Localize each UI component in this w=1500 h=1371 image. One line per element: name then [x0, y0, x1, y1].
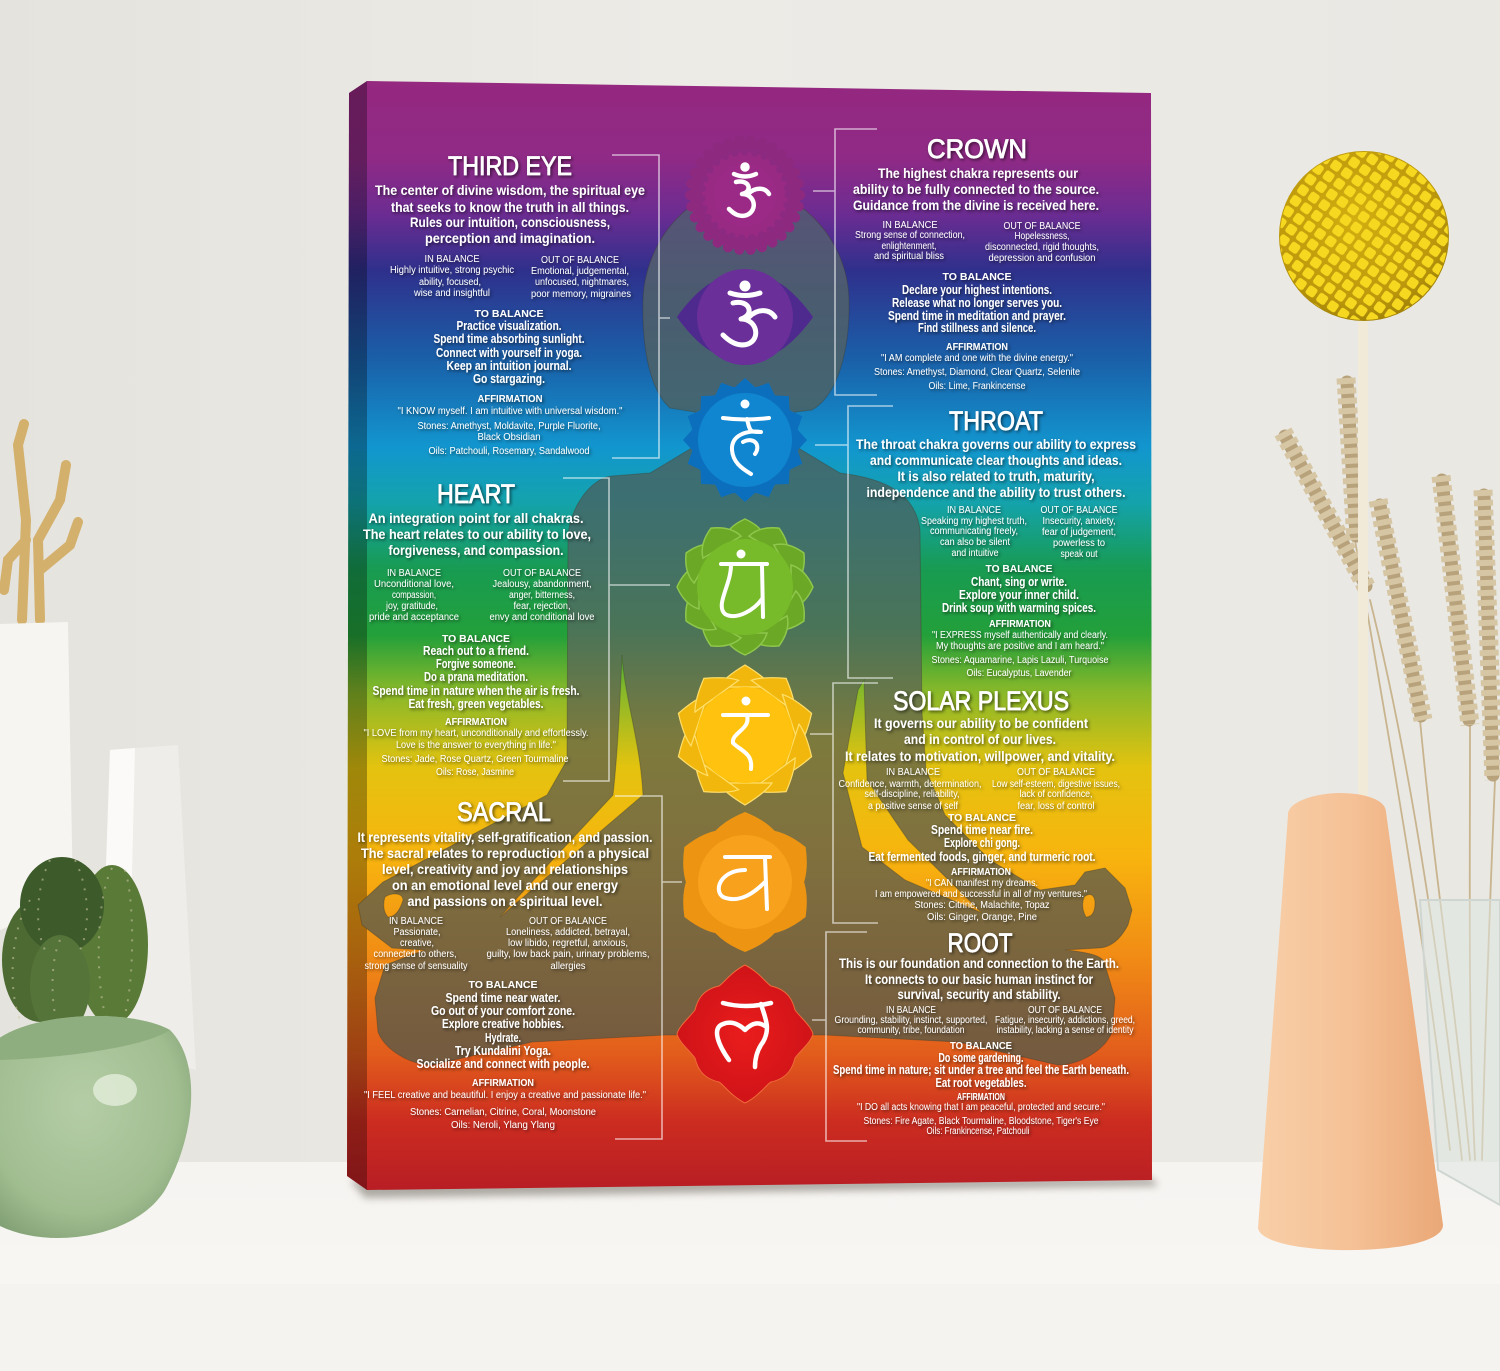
affirmation and stones: AFFIRMATION [478, 394, 542, 405]
out of balance: OUT OF BALANCE [1004, 221, 1081, 232]
to balance: TO BALANCE [948, 812, 1016, 824]
third eye symbol [723, 283, 775, 345]
description: and passions on a spiritual level. [408, 893, 602, 909]
description: Guidance from the divine is received here. [853, 197, 1099, 213]
out of balance: anger, bitterness, [509, 590, 575, 601]
affirmation and stones: Love is the answer to everything in life." [396, 740, 556, 751]
affirmation and stones: "I KNOW myself. I am intuitive with universal wisdom." [398, 406, 623, 417]
to balance: Drink soup with warming spices. [942, 601, 1096, 615]
description: Rules our intuition, consciousness, [410, 214, 610, 230]
in balance: creative, [400, 938, 434, 949]
out of balance: OUT OF BALANCE [1017, 767, 1095, 778]
affirmation and stones: AFFIRMATION [951, 867, 1011, 878]
affirmation and stones [932, 619, 1109, 679]
panel: third eye [375, 151, 645, 457]
canvas: rainbow background with spine [347, 81, 1152, 1190]
out of balance: disconnected, rigid thoughts, [985, 242, 1099, 253]
out of balance: depression and confusion [988, 253, 1096, 264]
sacral symbol [719, 857, 770, 909]
to balance: Spend time near water. [446, 991, 560, 1005]
out of balance: Low self-esteem, digestive issues, [992, 779, 1120, 790]
description [375, 182, 645, 246]
description [839, 955, 1119, 1002]
affirmation and stones [875, 867, 1087, 923]
affirmation and stones: Stones: Amethyst, Moldavite, Purple Fluorite, [418, 421, 600, 432]
description [856, 436, 1136, 500]
description [845, 715, 1115, 764]
affirmation and stones: Oils: Eucalyptus, Lavender [966, 668, 1072, 679]
to balance: Eat root vegetables. [936, 1076, 1026, 1090]
description: The sacral relates to reproduction on a physical [361, 845, 649, 861]
to balance: Practice visualization. [456, 319, 562, 333]
affirmation and stones: Stones: Amethyst, Diamond, Clear Quartz, Selenite [874, 367, 1080, 378]
in balance: Passionate, [394, 927, 440, 938]
affirmation and stones [398, 394, 623, 457]
to balance: Socialize and connect with people. [416, 1057, 590, 1071]
decor: cactus [2, 857, 148, 1035]
heading: sacral: SACRAL [457, 797, 551, 827]
panel: root [833, 928, 1135, 1137]
to balance: TO BALANCE [474, 308, 544, 320]
in balance: self-discipline, reliability, [864, 789, 960, 800]
affirmation and stones [364, 1078, 646, 1131]
affirmation and stones: Stones: Fire Agate, Black Tourmaline, Bloodstone, Tiger's Eye [864, 1116, 1099, 1127]
affirmation and stones: I am empowered and successful in all of my ventures." [875, 889, 1087, 900]
in balance: Confidence, warmth, determination, [838, 779, 982, 790]
in balance: IN BALANCE [947, 505, 1001, 516]
out of balance: speak out [1060, 549, 1098, 560]
description: An integration point for all chakras. [368, 510, 584, 526]
out of balance: unfocused, nightmares, [535, 277, 629, 288]
to balance: Spend time in meditation and prayer. [888, 309, 1066, 323]
throat symbol [723, 402, 769, 474]
decor: yellow ball flower [1279, 151, 1449, 321]
in balance: IN BALANCE [886, 767, 940, 778]
in balance: wise and insightful [413, 288, 490, 299]
in balance: connected to others, [374, 949, 456, 960]
to balance: Keep an intuition journal. [446, 359, 572, 373]
in balance: enlightenment, [882, 241, 936, 252]
description: forgiveness, and compassion. [388, 542, 564, 558]
decor: glass vase [1420, 900, 1500, 1205]
panel: throat [856, 406, 1136, 679]
description [853, 165, 1099, 213]
to balance [888, 271, 1066, 335]
panel: crown [853, 134, 1099, 392]
description: on an emotional level and our energy [392, 877, 618, 893]
chakra: root [677, 965, 813, 1103]
affirmation and stones: Black Obsidian [478, 432, 540, 443]
decor: tall white vase [0, 622, 73, 930]
out of balance: fear, loss of control [1018, 801, 1094, 812]
chakra: throat [683, 378, 807, 502]
to balance: Find stillness and silence. [918, 321, 1036, 335]
affirmation and stones: Oils: Neroli, Ylang Ylang [451, 1120, 555, 1131]
out of balance: OUT OF BALANCE [529, 916, 607, 927]
to balance: Release what no longer serves you. [892, 296, 1062, 310]
in balance: Strong sense of connection, [855, 230, 965, 241]
in balance: IN BALANCE [882, 220, 938, 231]
out of balance [985, 221, 1099, 264]
in balance: community, tribe, foundation [858, 1025, 964, 1036]
out of balance: poor memory, migraines [531, 289, 631, 300]
in balance: IN BALANCE [389, 916, 443, 927]
panel: heart [363, 479, 595, 778]
in balance: ability, focused, [419, 277, 481, 288]
affirmation and stones: My thoughts are positive and I am heard." [936, 641, 1104, 652]
affirmation and stones: AFFIRMATION [472, 1078, 534, 1089]
affirmation and stones: "I CAN manifest my dreams. [926, 878, 1038, 889]
to balance: Do a prana meditation. [424, 670, 528, 684]
in balance: Highly intuitive, strong psychic [390, 265, 514, 276]
affirmation and stones [364, 717, 588, 778]
to balance [434, 308, 584, 386]
affirmation and stones: Stones: Carnelian, Citrine, Coral, Moonstone [410, 1107, 596, 1118]
to balance [942, 563, 1096, 615]
bracket: third eye [612, 155, 670, 458]
in balance: Grounding, stability, instinct, supported, [834, 1015, 988, 1026]
to balance: Explore creative hobbies. [442, 1017, 564, 1031]
description: The heart relates to our ability to love, [363, 526, 591, 542]
to balance: TO BALANCE [468, 979, 538, 991]
out of balance: fear, rejection, [514, 601, 570, 612]
in balance: IN BALANCE [387, 568, 441, 579]
decor: peach vase [1258, 793, 1443, 1250]
description: It is also related to truth, maturity, [898, 468, 1094, 484]
description: It represents vitality, self-gratification, and passion. [358, 829, 652, 845]
affirmation and stones: "I FEEL creative and beautiful. I enjoy a creative and passionate life." [364, 1090, 646, 1101]
description: perception and imagination. [425, 230, 595, 246]
to balance [372, 633, 580, 711]
to balance: Spend time in nature when the air is fresh. [372, 684, 580, 698]
affirmation and stones: "I LOVE from my heart, unconditionally and effortlessly. [364, 728, 588, 739]
affirmation and stones: Oils: Patchouli, Rosemary, Sandalwood [428, 446, 590, 457]
affirmation and stones: AFFIRMATION [957, 1092, 1005, 1103]
out of balance: OUT OF BALANCE [503, 568, 581, 579]
affirmation and stones [857, 1092, 1105, 1137]
out of balance: OUT OF BALANCE [541, 255, 619, 266]
to balance: Spend time absorbing sunlight. [434, 332, 584, 346]
in balance: a positive sense of self [868, 801, 958, 812]
affirmation and stones: Stones: Jade, Rose Quartz, Green Tourmaline [382, 754, 569, 765]
heading: crown: CROWN [927, 134, 1027, 164]
affirmation and stones: Stones: Citrine, Malachite, Topaz [914, 900, 1050, 911]
out of balance: guilty, low back pain, urinary problems, [486, 949, 650, 960]
heart symbol [721, 552, 767, 617]
description: The center of divine wisdom, the spiritual eye [375, 182, 645, 198]
out of balance: OUT OF BALANCE [1040, 505, 1118, 516]
heading: solar plexus: SOLAR PLEXUS [893, 686, 1069, 716]
description: independence and the ability to trust others. [866, 484, 1126, 500]
in balance [834, 1005, 988, 1036]
out of balance [531, 255, 631, 300]
bracket: sacral [615, 796, 682, 1139]
bracket: throat [815, 406, 893, 678]
heading: root: ROOT [948, 928, 1012, 958]
chakra: third eye [677, 269, 813, 365]
crown symbol [729, 164, 769, 216]
to balance: Reach out to a friend. [423, 644, 529, 658]
description [358, 829, 652, 909]
in balance: strong sense of sensuality [364, 961, 468, 972]
to balance: Try Kundalini Yoga. [455, 1044, 551, 1058]
description: ability to be fully connected to the source. [853, 181, 1099, 197]
to balance: Spend time in nature; sit under a tree and feel the Earth beneath. [833, 1063, 1129, 1077]
in balance [369, 568, 459, 623]
out of balance: Hopelessness, [1014, 231, 1070, 242]
description: and communicate clear thoughts and ideas. [870, 452, 1122, 468]
bracket: root [812, 932, 867, 1141]
solar plexus symbol [723, 698, 768, 769]
heading: heart: HEART [437, 479, 515, 509]
to balance: Connect with yourself in yoga. [436, 346, 582, 360]
decor: wheat stalks [1283, 378, 1495, 1160]
in balance [364, 916, 468, 972]
description: This is our foundation and connection to the Earth. [839, 955, 1119, 971]
in balance: Speaking my highest truth, [921, 516, 1027, 527]
to balance [868, 812, 1096, 864]
to balance: TO BALANCE [442, 633, 510, 645]
affirmation and stones: AFFIRMATION [445, 717, 507, 728]
affirmation and stones: AFFIRMATION [989, 619, 1051, 630]
description: It connects to our basic human instinct for [865, 971, 1093, 987]
out of balance [995, 1005, 1135, 1036]
to balance: Chant, sing or write. [971, 575, 1067, 589]
description: and in control of our lives. [904, 731, 1056, 747]
in balance [921, 505, 1027, 559]
in balance: compassion, [392, 590, 436, 601]
in balance: Unconditional love, [374, 579, 454, 590]
out of balance [1040, 505, 1118, 560]
affirmation and stones: "I EXPRESS myself authentically and clearly. [932, 630, 1108, 641]
to balance: Explore your inner child. [959, 588, 1079, 602]
out of balance: Emotional, judgemental, [531, 266, 629, 277]
to balance: Do some gardening. [938, 1051, 1024, 1065]
heading: throat: THROAT [949, 406, 1043, 436]
description: survival, security and stability. [898, 986, 1060, 1002]
affirmation and stones: Oils: Frankincense, Patchouli [926, 1126, 1030, 1137]
affirmation and stones [874, 342, 1080, 392]
description: The throat chakra governs our ability to express [856, 436, 1136, 452]
description: It governs our ability to be confident [874, 715, 1088, 731]
to balance: Eat fermented foods, ginger, and turmeric root. [868, 850, 1096, 864]
out of balance: powerless to [1053, 538, 1105, 549]
out of balance [992, 767, 1120, 812]
bracket: solar plexus [810, 683, 878, 923]
to balance: Go out of your comfort zone. [431, 1004, 575, 1018]
decor: faceted white vase [100, 745, 196, 1070]
affirmation and stones: AFFIRMATION [946, 342, 1008, 353]
in balance: IN BALANCE [424, 254, 480, 265]
in balance [390, 254, 514, 299]
chakra: crown [690, 140, 800, 250]
out of balance [486, 916, 650, 972]
to balance: Forgive someone. [436, 657, 516, 671]
to balance: Eat fresh, green vegetables. [408, 697, 544, 711]
to balance: TO BALANCE [942, 271, 1012, 283]
affirmation and stones: Stones: Aquamarine, Lapis Lazuli, Turquoise [932, 655, 1109, 666]
affirmation and stones: "I DO all acts knowing that I am peaceful, protected and secure." [857, 1102, 1105, 1113]
in balance: joy, gratitude, [385, 601, 438, 612]
decor: green ceramic bowl [0, 1016, 191, 1238]
in balance: pride and acceptance [369, 612, 459, 623]
out of balance: envy and conditional love [490, 612, 595, 623]
in balance [855, 220, 965, 262]
affirmation and stones: Oils: Ginger, Orange, Pine [927, 912, 1037, 923]
meditating silhouette [358, 188, 1132, 1065]
out of balance: Fatigue, insecurity, addictions, greed, [995, 1015, 1135, 1026]
to balance: Spend time near fire. [931, 823, 1033, 837]
out of balance: lack of confidence, [1020, 789, 1092, 800]
out of balance: instability, lacking a sense of identity [996, 1025, 1134, 1036]
to balance: TO BALANCE [950, 1040, 1012, 1052]
bracket: heart [563, 478, 670, 781]
description: It relates to motivation, willpower, and vitality. [845, 748, 1115, 764]
to balance: Hydrate. [485, 1031, 521, 1045]
affirmation and stones: Oils: Rose, Jasmine [436, 767, 514, 778]
shelf [0, 1162, 1500, 1371]
in balance: and intuitive [952, 548, 999, 559]
panel: solar plexus [838, 686, 1120, 923]
to balance: TO BALANCE [986, 563, 1052, 575]
out of balance: low libido, regretful, anxious, [508, 938, 628, 949]
canvas shadow [350, 1178, 1158, 1198]
out of balance [490, 568, 595, 623]
out of balance: allergies [550, 961, 586, 972]
out of balance: Loneliness, addicted, betrayal, [506, 927, 630, 938]
out of balance: Insecurity, anxiety, [1042, 516, 1116, 527]
out of balance: OUT OF BALANCE [1028, 1005, 1102, 1016]
to balance: Declare your highest intentions. [902, 283, 1052, 297]
affirmation and stones: Oils: Lime, Frankincense [928, 381, 1026, 392]
in balance: can also be silent [940, 537, 1010, 548]
affirmation and stones: "I AM complete and one with the divine energy." [881, 353, 1073, 364]
out of balance: fear of judgement, [1042, 527, 1116, 538]
out of balance: Jealousy, abandonment, [492, 579, 592, 590]
decor: flower stem [1358, 318, 1368, 798]
to balance [833, 1040, 1129, 1090]
decor: wooden branch ornament [4, 424, 78, 620]
root symbol [717, 1003, 771, 1067]
chakra: solar plexus [670, 662, 820, 808]
in balance: and spiritual bliss [874, 251, 944, 262]
in balance: communicating freely, [930, 526, 1018, 537]
description [363, 510, 591, 558]
description: that seeks to know the truth in all things. [391, 199, 629, 215]
to balance: Go stargazing. [473, 372, 545, 386]
description: The highest chakra represents our [878, 165, 1078, 181]
to balance: Explore chi gong. [944, 836, 1020, 850]
chakra: sacral [665, 812, 825, 952]
to balance [416, 979, 590, 1071]
bracket: crown [813, 129, 877, 395]
in balance: IN BALANCE [886, 1005, 936, 1016]
heading: third eye: THIRD EYE [448, 151, 572, 181]
description: level, creativity and joy and relationships [382, 861, 628, 877]
chakra: heart [675, 517, 815, 657]
in balance [838, 767, 982, 812]
panel: sacral [358, 797, 652, 1131]
